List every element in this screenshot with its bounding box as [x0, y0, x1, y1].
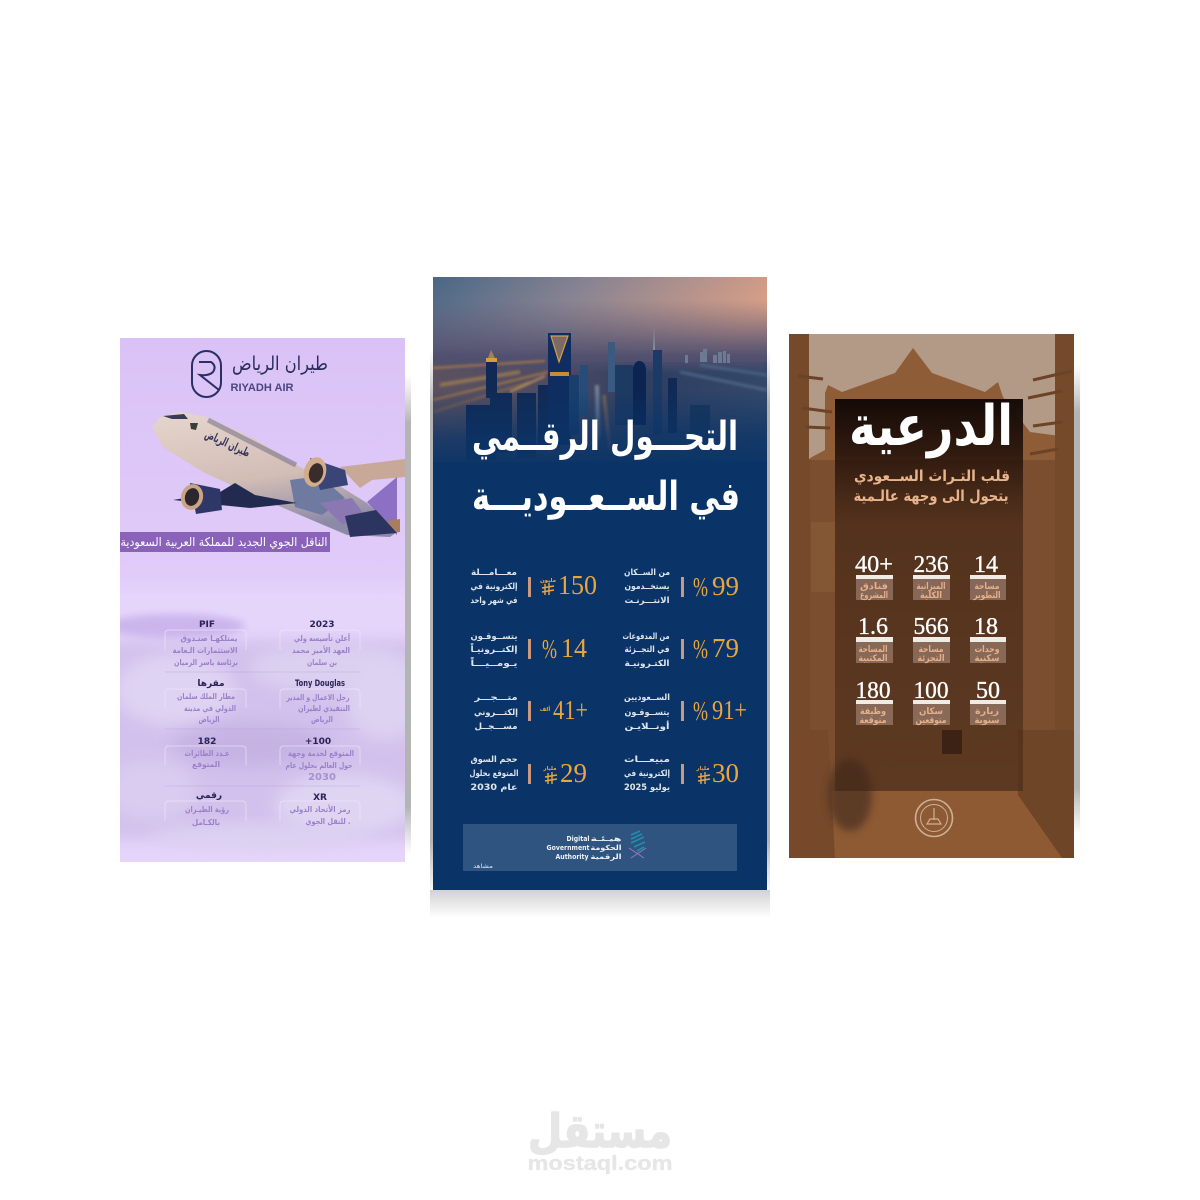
- stat: 41 thousand: إلكتـــروني: [474, 708, 518, 718]
- fact: 2023: 2023: [309, 620, 335, 630]
- footer: Digital Government Authority: [463, 824, 737, 871]
- footer text: Authority: [556, 853, 589, 861]
- stat: 14%: [470, 632, 587, 669]
- stat: 50 annual visits: زيارة: [975, 707, 999, 717]
- illustration: airplane: [152, 412, 405, 537]
- photo: Riyadh skyline: [433, 277, 767, 470]
- stat: 40+ hotels: المشروع: [860, 591, 888, 601]
- stat: 99%: %: [693, 572, 708, 602]
- stats grid: [470, 568, 747, 793]
- stat: 30 billion: يوليو 2025: [624, 783, 670, 793]
- stat: 91%+: 91+: [712, 695, 747, 725]
- panel: Diriyah: [789, 334, 1074, 858]
- fact: +100: حول العالم بحلول عام: [286, 761, 353, 770]
- stat: 14 development area: 14: [974, 552, 998, 578]
- stat: 99%: يستخــدمون: [624, 582, 670, 592]
- stat: 41 thousand: 41+: [553, 695, 588, 725]
- footer text: الرقمية: [590, 853, 622, 861]
- footer text: الحكومة: [590, 844, 622, 852]
- brand name arabic: طيران الرياض: [232, 353, 328, 375]
- fact: Tony Douglas: الرياض: [311, 715, 333, 725]
- stat: 14%: إلكتــرونيـاً: [470, 642, 518, 655]
- stat: 29 billion: [470, 755, 587, 793]
- signature: مشاهد: [473, 863, 493, 870]
- title: التحـــول الرقــمي: [472, 414, 738, 460]
- stat: 180 jobs: متوقعة: [860, 716, 886, 726]
- fact: headquarters: مقرها: [197, 679, 225, 689]
- stat: 14 development area: [973, 552, 1000, 601]
- footer text: Digital: [566, 835, 590, 843]
- panel: Riyadh Air: [120, 338, 405, 862]
- stat: 14%: يتســوقـون: [470, 632, 518, 642]
- fact: Tony Douglas: Tony Douglas: [295, 679, 345, 689]
- footer text: هيـئـة: [590, 835, 622, 843]
- stat: 100 residents: متوقعين: [916, 716, 946, 726]
- stat: 41 thousand: مســـجــل: [474, 722, 518, 732]
- fact: +100: +100: [305, 737, 331, 747]
- fact: XR: للنقل الجوي .: [306, 817, 350, 826]
- dark overlay panel: [835, 399, 1023, 791]
- stat: 99%: 99: [712, 571, 739, 601]
- stat: 40+ hotels: فنادق: [860, 582, 888, 592]
- fact: 182: [184, 737, 230, 769]
- stat: 566 retail area: [914, 614, 948, 664]
- stat: 91%+: الســعوديين: [624, 693, 670, 703]
- fact: 2023: العهد الأمير محمد: [292, 645, 350, 655]
- watermark: mostaql: مستقل: [528, 1104, 672, 1158]
- stat: 40+ hotels: 40+: [855, 552, 893, 578]
- fact: PIF: برئاسة ياسر الرميان: [174, 658, 238, 667]
- stat: 566 retail area: 566: [914, 614, 948, 640]
- fact: PIF: [172, 620, 238, 667]
- icon: seal: [916, 800, 952, 836]
- title: في الســعــوديـــة: [472, 474, 740, 520]
- panel shadows: [405, 350, 1080, 918]
- fact: digital: رؤية الطيـران: [185, 805, 229, 814]
- footer text: [546, 835, 622, 861]
- fact: Tony Douglas: [286, 679, 350, 725]
- icon: authority emblem: [629, 831, 646, 858]
- stat: 29 billion: 29: [560, 758, 587, 788]
- stat: 1.6 office area: المكتبية: [858, 654, 888, 664]
- fact: PIF: الاستثمارات الـعامة: [172, 646, 238, 655]
- fact: headquarters: [177, 679, 236, 725]
- stat: 236 budget: الكلية: [920, 591, 942, 601]
- stat: 29 billion: حجم السوق: [470, 755, 518, 765]
- stat: 14%: %: [542, 634, 557, 664]
- stat: 50 annual visits: سنوية: [974, 716, 1000, 726]
- stat: 150 million: في شهر واحد: [470, 596, 518, 606]
- fact: headquarters: الدولي في مدينة: [184, 704, 236, 713]
- stat: 180 jobs: 180: [856, 678, 890, 704]
- stat: 99%: [624, 568, 739, 606]
- stat: 30 billion: مليار: [695, 766, 710, 772]
- fact: digital: رقمي: [196, 791, 222, 801]
- stat: 30 billion: [624, 755, 739, 793]
- fact: 2023: بن سلمان: [307, 658, 337, 667]
- fact: XR: رمز الأتحاد الدولي: [290, 804, 351, 814]
- fact: digital: [185, 791, 229, 827]
- title: [472, 414, 740, 520]
- stat: 99%: الانتـــرنـت: [624, 596, 670, 606]
- stat: 41 thousand: [474, 696, 587, 731]
- stat: 150 million: مليون: [540, 578, 556, 584]
- stat: 50 annual visits: [974, 678, 1000, 726]
- stat: 236 budget: الميزانية: [916, 582, 946, 592]
- footer text: Government: [546, 844, 590, 852]
- stat: 180 jobs: وظيفة: [860, 707, 886, 717]
- fact: 182: 182: [198, 737, 216, 747]
- brand name latin: RIYADH AIR: [230, 382, 294, 394]
- fact: 182: المتوقع: [192, 760, 220, 769]
- stat: 18 housing units: سكنية: [974, 654, 1000, 664]
- fact: Tony Douglas: رجل الاعمال و المدير: [286, 693, 350, 702]
- stat: 41 thousand: ألف: [540, 705, 550, 713]
- fact: +100: [286, 737, 354, 783]
- fact: 182: عـدد الطائرات: [184, 749, 230, 758]
- stat: 30 billion: مبيعـــات: [624, 755, 670, 765]
- stat: 91%+: [624, 693, 747, 732]
- stats grid: [855, 552, 1006, 726]
- fact: +100: المتوقع لخدمة وجهة: [288, 749, 354, 758]
- fact: XR: [290, 793, 351, 826]
- stat: 100 residents: سكان: [919, 707, 943, 717]
- stat: 1.6 office area: [858, 614, 888, 664]
- stat: 91%+: %: [693, 696, 708, 726]
- fact: +100: 2030: [308, 772, 336, 783]
- title: يتحول الى وجهة عالـمية: [854, 487, 1008, 505]
- stat: 79%: في التجــزئة: [624, 645, 670, 655]
- stat: 40+ hotels: [855, 556, 892, 600]
- logo: Riyadh Air: [192, 351, 328, 397]
- stat: 29 billion: مليار: [542, 766, 557, 772]
- title: قلب التـراث الســعودي: [854, 467, 1010, 486]
- stat: 79%: الكتـرونيـة: [624, 659, 670, 669]
- stat: 91%+: أونــلايـن: [624, 720, 670, 732]
- stat: 236 budget: [914, 556, 948, 600]
- fact: 2023: أعلن تأسيسه ولي: [294, 633, 350, 643]
- fact: XR: XR: [313, 793, 327, 803]
- banner: tagline: [120, 532, 330, 552]
- fact: 2023: [292, 620, 350, 667]
- stat: 29 billion: عام 2030: [470, 783, 518, 793]
- stat: 566 retail area: التجزئة: [918, 654, 944, 664]
- fact: headquarters: الرياض: [198, 715, 220, 725]
- stat: 150 million: 150: [558, 570, 597, 600]
- stat: 30 billion: إلكترونية في: [624, 769, 670, 779]
- stat: 79%: من المدفوعات: [622, 632, 670, 642]
- stat: 100 residents: [914, 678, 948, 726]
- stat: 14 development area: التطوير: [973, 591, 1000, 601]
- watermark: mostaql: [528, 1104, 672, 1175]
- banner: tagline: الناقل الجوي الجديد للمملكة العربية السعودية: [120, 535, 328, 550]
- stat: 150 million: معـــامـــلة: [471, 568, 517, 578]
- title: [852, 402, 1010, 505]
- illustration: airplane: طيران الرياض: [203, 427, 252, 460]
- stat: 18 housing units: [974, 614, 1000, 664]
- stat: 14%: يـومــيـــاً: [470, 656, 518, 669]
- stat: 79%: 79: [712, 633, 739, 663]
- stat: 150 million: [470, 568, 597, 606]
- stat: 236 budget: 236: [914, 552, 948, 578]
- stat: 91%+: يتســوقـون: [624, 708, 670, 718]
- fact: PIF: PIF: [199, 620, 215, 630]
- fact: Tony Douglas: التنفيذي لطيران: [298, 704, 350, 713]
- fact: headquarters: مطار الملك سلمان: [177, 692, 235, 701]
- icon: R emblem: [192, 351, 221, 397]
- stat: 18 housing units: 18: [974, 614, 998, 640]
- stat: 14 development area: مساحة: [974, 582, 1000, 592]
- stat: 18 housing units: وحدات: [974, 645, 1000, 655]
- stat: 29 billion: المتوقع بحلول: [470, 769, 519, 779]
- stat: 1.6 office area: 1.6: [858, 614, 888, 640]
- fact: PIF: يمتلكهـا صنـدوق: [180, 634, 238, 643]
- stat: 14%: 14: [561, 633, 587, 663]
- facts grid: [165, 620, 360, 827]
- stat: 79%: [622, 632, 739, 669]
- stat: 100 residents: 100: [914, 678, 948, 704]
- watermark: mostaql: mostaql.com: [528, 1153, 672, 1175]
- stat: 50 annual visits: 50: [976, 678, 1000, 704]
- fact: digital: بالكـامل: [192, 818, 220, 827]
- stat: 566 retail area: مساحة: [918, 645, 944, 655]
- stat: 30 billion: 30: [712, 758, 739, 788]
- stat: 180 jobs: [856, 678, 890, 726]
- stat: 150 million: إلكترونية في: [470, 582, 518, 592]
- stat: 99%: من الســكان: [624, 568, 670, 578]
- stat: 1.6 office area: المساحة: [858, 645, 888, 655]
- panel: digital transformation: [433, 277, 767, 890]
- clouds: [120, 612, 405, 846]
- stat: 79%: %: [693, 634, 708, 664]
- photo: mud-brick alley: [789, 334, 1074, 858]
- title: الدرعية: [849, 394, 1013, 459]
- stat: 41 thousand: متـــجـــر: [473, 693, 518, 703]
